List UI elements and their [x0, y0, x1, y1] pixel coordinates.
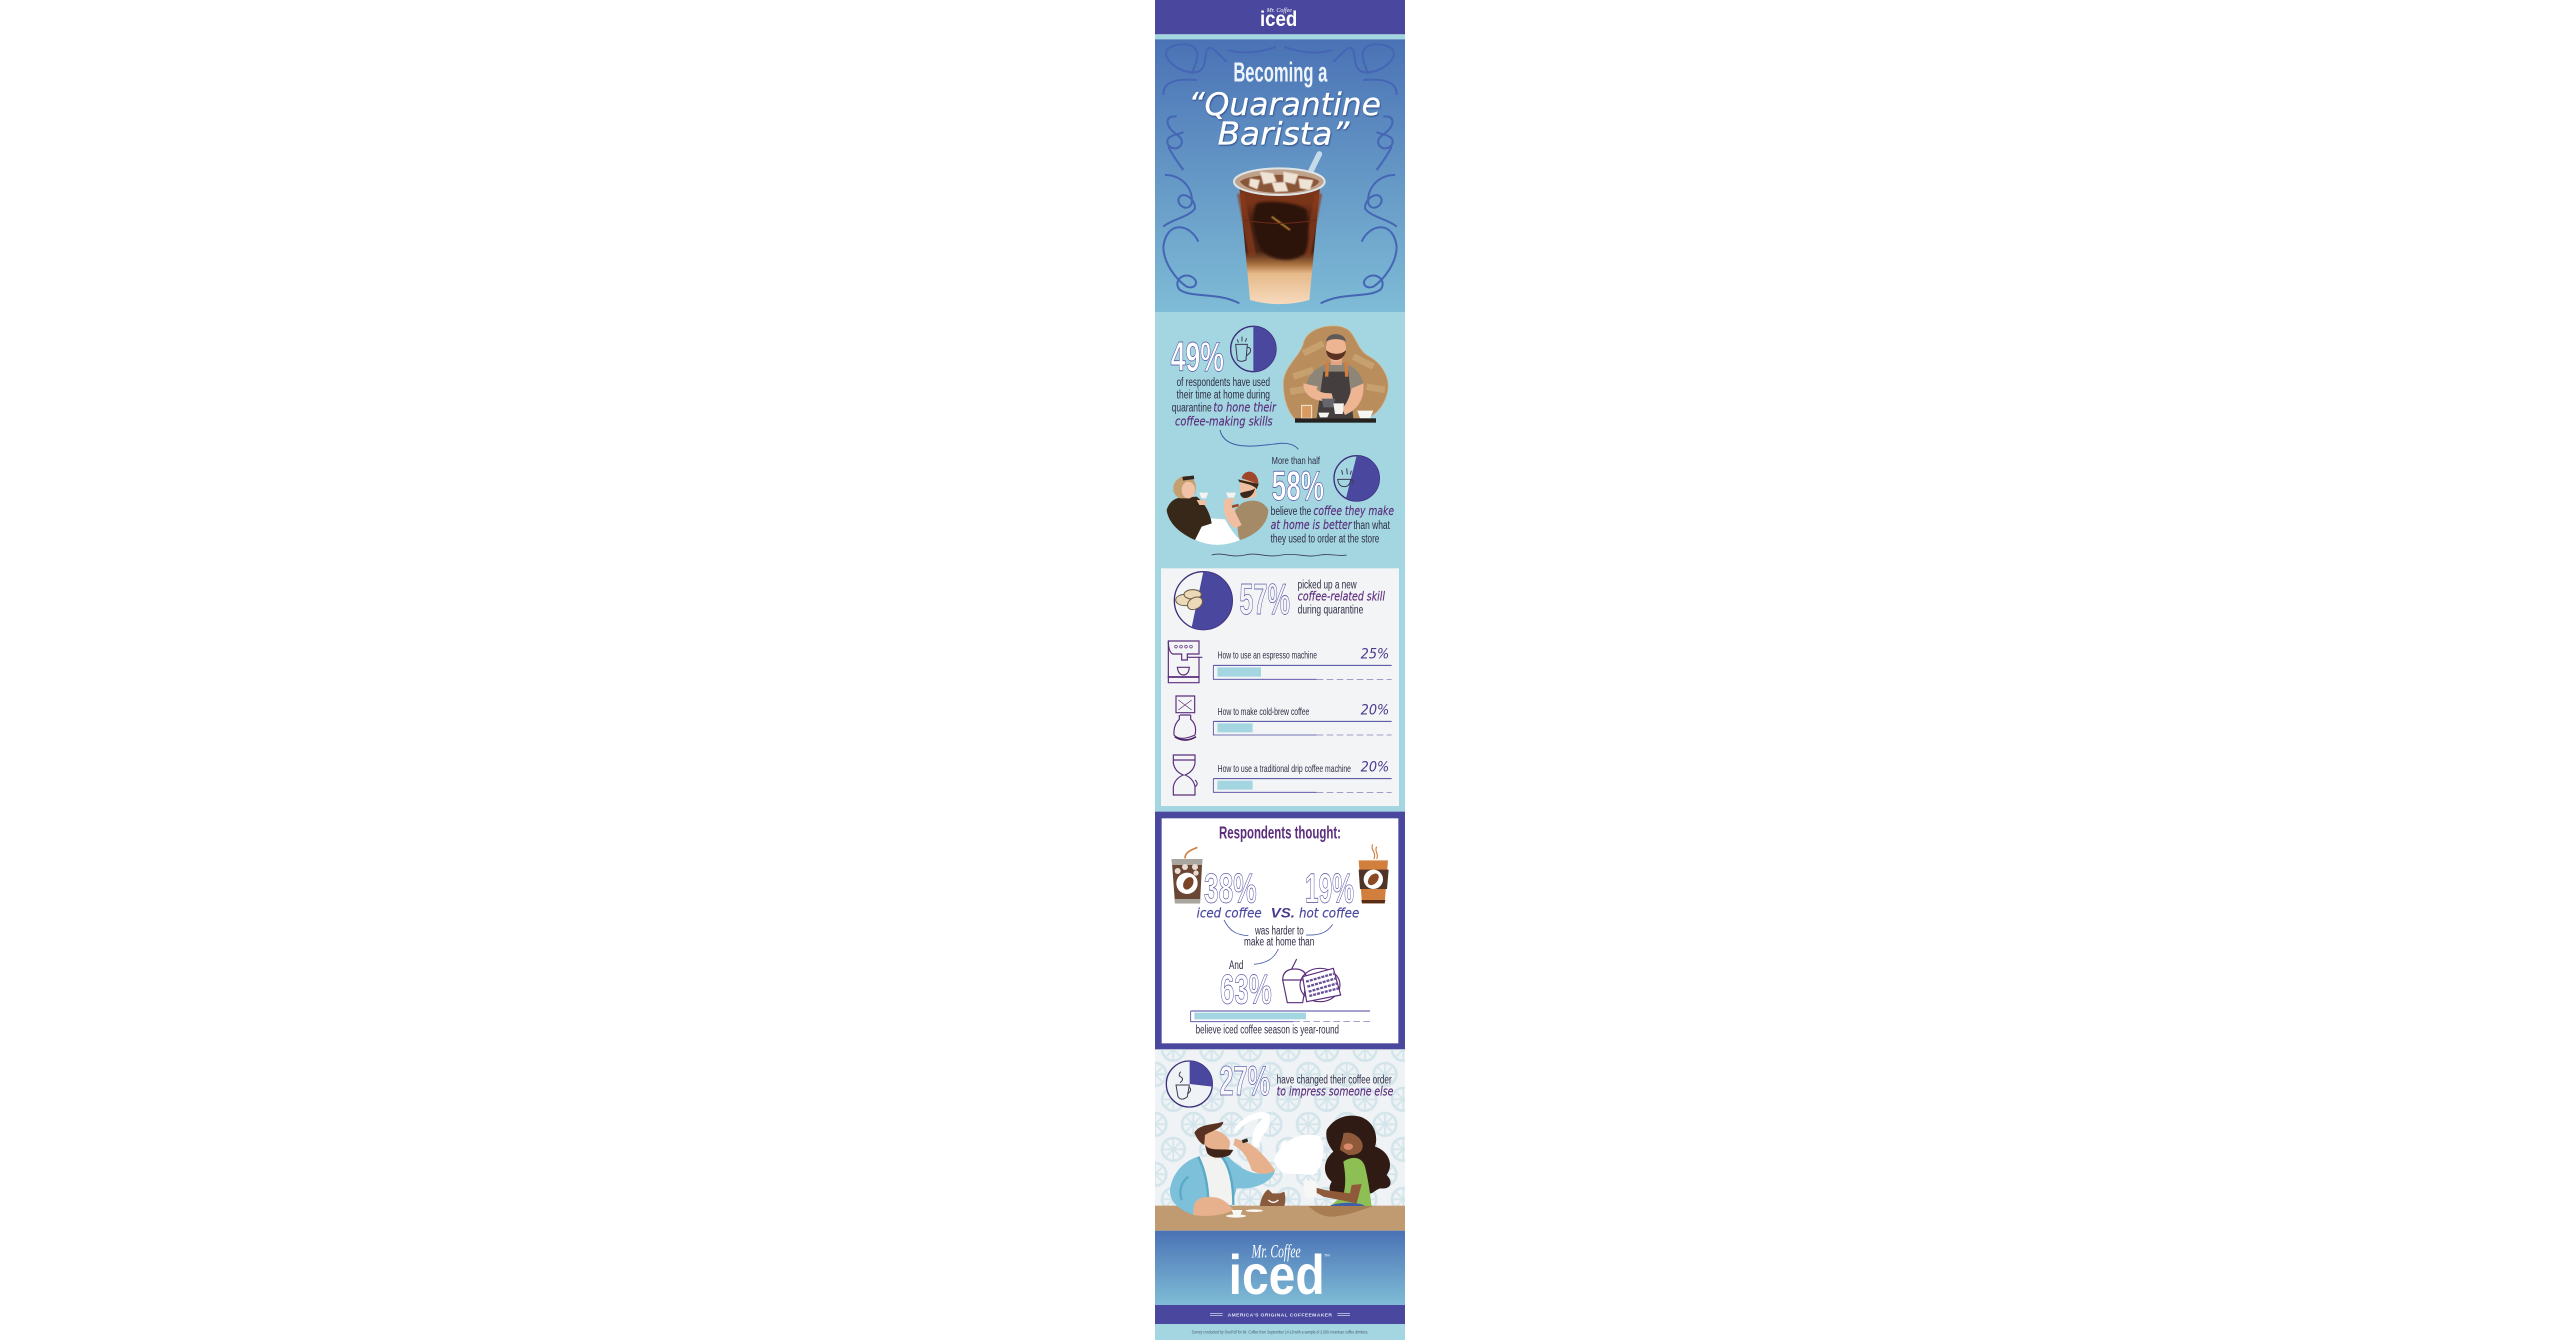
footer gradient panel	[1155, 1231, 1405, 1305]
text: harder to make: make at home than	[1244, 935, 1314, 949]
iced coffee cup photo illustration	[1234, 154, 1325, 304]
title: “Quarantine	[1188, 87, 1381, 123]
skill row: espresso machine	[1213, 646, 1392, 679]
pie chart 57 percent with beans	[1174, 572, 1232, 630]
purple tagline band	[1155, 1305, 1405, 1324]
text: harder to make: was harder to	[1254, 923, 1304, 937]
stat 19 percent: 19%	[1305, 865, 1354, 911]
skill row: drip machine	[1213, 759, 1392, 792]
teal surround	[1155, 560, 1405, 812]
section: 57% new skill panel	[1155, 560, 1405, 812]
icon: drip coffee maker	[1173, 755, 1197, 795]
stat 63 percent: 63%	[1220, 966, 1272, 1012]
skill row: cold brew: 20%	[1361, 702, 1389, 718]
stat 38 percent: 38%	[1204, 865, 1257, 911]
light section start	[1155, 312, 1405, 320]
icon: cold brew maker	[1174, 696, 1196, 740]
stat 49 percent: 49%	[1171, 334, 1224, 380]
comparison labels: hot coffee	[1299, 906, 1359, 921]
text block 58 percent: coffee they make	[1313, 504, 1394, 518]
icon: espresso machine	[1168, 641, 1202, 683]
top logo: Mr. Coffee	[1266, 7, 1292, 14]
skill row: espresso machine: 25%	[1361, 646, 1389, 662]
text block 57 percent: coffee-related skill	[1298, 590, 1386, 604]
illustration: couple drinking coffee	[1167, 472, 1268, 545]
text block 27 percent: have changed their coffee order	[1277, 1072, 1392, 1086]
text block 49 percent: quarantine	[1172, 401, 1212, 415]
label And: And	[1229, 958, 1243, 972]
section: respondents thought framed panel	[1158, 815, 1402, 1047]
teal background	[1155, 312, 1405, 565]
text block 58 percent: they used to order at the store	[1271, 532, 1380, 546]
text block 58 percent: than what	[1353, 518, 1390, 532]
stat 58 percent: 58%	[1272, 463, 1324, 509]
stat 57 percent: 57%	[1239, 576, 1290, 624]
skill row: drip machine: How to use a traditional drip coffee machine	[1218, 764, 1351, 775]
text block 27 percent: to impress someone else	[1277, 1085, 1393, 1099]
steam	[1235, 1112, 1323, 1175]
text block 49 percent: coffee-making skills	[1175, 415, 1273, 429]
text block 49 percent	[1172, 375, 1277, 429]
table	[1155, 1206, 1405, 1231]
title: Becoming a	[1233, 57, 1328, 88]
heading: Respondents thought:	[1219, 822, 1341, 842]
pie chart 49 percent with mug	[1231, 326, 1276, 372]
text block 58 percent: at home is better	[1271, 518, 1352, 532]
text block 27 percent	[1277, 1072, 1393, 1099]
text block 58 percent: believe the	[1271, 504, 1312, 518]
footer logo: iced	[1229, 1244, 1325, 1306]
footer logo: Mr. Coffee	[1251, 1241, 1301, 1262]
squiggle divider	[1212, 554, 1347, 556]
skill row: cold brew	[1213, 702, 1392, 735]
decorative ribbons	[1163, 44, 1397, 303]
stat 27 percent: 27%	[1219, 1058, 1270, 1104]
comparison labels	[1197, 904, 1359, 921]
comparison labels: VS.	[1271, 904, 1295, 920]
section: 49% and 58% stats	[1155, 312, 1405, 565]
title	[1188, 57, 1381, 152]
patterned background	[1155, 1049, 1405, 1206]
bar: 63 percent	[1191, 1011, 1370, 1022]
top logo: iced	[1260, 7, 1297, 31]
icon: frozen drink and calendar	[1283, 959, 1341, 1003]
caption: year round: believe iced coffee season is year-round	[1196, 1023, 1339, 1037]
skill row: cold brew: How to make cold-brew coffee	[1218, 707, 1309, 718]
hero gradient panel	[1155, 39, 1405, 312]
icon: iced coffee cup	[1172, 847, 1202, 903]
text: harder to make	[1244, 923, 1314, 949]
text block 49 percent: of respondents have used	[1177, 375, 1270, 389]
connector curves	[1224, 920, 1333, 964]
comparison labels: iced coffee	[1197, 906, 1262, 921]
text block 49 percent: to hone their	[1213, 401, 1277, 415]
top header and hero section	[1155, 0, 1405, 320]
light band under header	[1155, 34, 1405, 39]
header bar	[1155, 0, 1405, 34]
footer logo: TM	[1324, 1253, 1330, 1258]
text block 57 percent	[1298, 577, 1386, 616]
white panel	[1161, 568, 1399, 806]
label more than half: More than half	[1272, 456, 1320, 467]
text block 57 percent: during quarantine	[1298, 602, 1364, 616]
skill row: drip machine: 20%	[1361, 759, 1389, 775]
connector curve	[1220, 430, 1298, 449]
text block 58 percent	[1271, 504, 1394, 546]
illustration: cat	[1260, 1189, 1285, 1206]
illustration: man with coffee	[1170, 1122, 1275, 1218]
skill row: espresso machine: How to use an espresso machine	[1218, 651, 1317, 662]
tagline: AMERICA’S ORIGINAL COFFEEMAKER	[1228, 1312, 1332, 1318]
purple frame	[1158, 815, 1402, 1047]
survey note: Survey conducted by OnePoll for Mr. Coffee from September 14-18 with a sample of 2,000 American coffee drinkers.	[1192, 1330, 1368, 1335]
icon: hot coffee cup	[1359, 844, 1389, 903]
section: 27% impress someone	[1155, 1049, 1405, 1340]
title: Barista”	[1218, 116, 1350, 152]
pie chart 27 percent	[1166, 1061, 1212, 1107]
pie chart 58 percent with cup	[1334, 456, 1379, 501]
bottom band	[1155, 1324, 1405, 1340]
text block 49 percent: their time at home during	[1177, 387, 1270, 401]
illustration: barista	[1283, 326, 1388, 423]
text block 57 percent: picked up a new	[1298, 577, 1357, 591]
illustration: woman with coffee	[1303, 1116, 1391, 1217]
